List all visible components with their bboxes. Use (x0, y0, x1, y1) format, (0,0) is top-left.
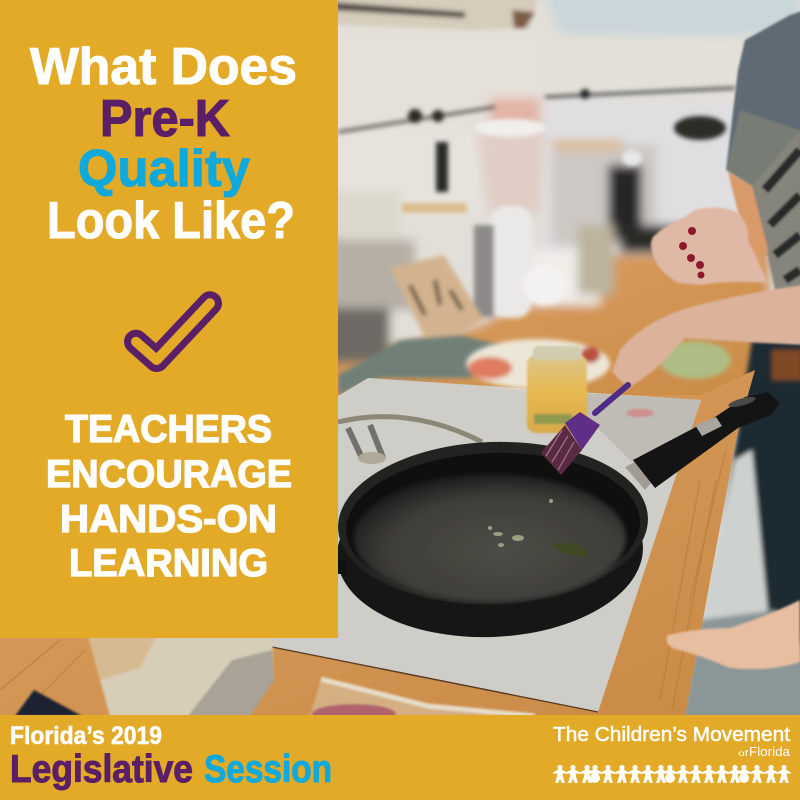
heading: What Does Pre-K Quality Look Like?: Look Like? (47, 192, 295, 250)
footer title: Florida's 2019 Legislative Session: Legislative (10, 748, 193, 791)
text block: Teachers encourage hands-on learning: ENCOURAGE (46, 453, 292, 496)
text block: Teachers encourage hands-on learning (46, 408, 292, 585)
footer title: Florida's 2019 Legislative Session: Session (204, 748, 332, 791)
text block: Teachers encourage hands-on learning: LEARNING (69, 542, 268, 585)
child's hand on counter (667, 600, 800, 669)
logo: The Children's Movement of Florida: of (738, 749, 749, 758)
oil droplets (488, 499, 588, 556)
frying pan (334, 392, 780, 642)
flour bowl in foreground (88, 636, 274, 716)
text block: Teachers encourage hands-on learning: HANDS-ON (60, 498, 277, 541)
heading: What Does Pre-K Quality Look Like?: Quality (78, 140, 250, 198)
person's t-shirt and arm (612, 10, 800, 388)
footer title: Florida's 2019 Legislative Session: Florida’s 2019 (10, 722, 162, 750)
logo: The Children's Movement of Florida: The Children’s Movement (553, 724, 790, 746)
text block: Teachers encourage hands-on learning: TEACHERS (65, 408, 272, 451)
kitchen background wall and appliances (300, 0, 800, 450)
upper hand with red nails (651, 208, 768, 285)
plate of food and green bowl (466, 339, 731, 389)
jar of oil (527, 346, 587, 433)
plastic-wrapped meat package (310, 679, 535, 724)
logo: The Children's Movement of Florida (553, 724, 791, 783)
heading: What Does Pre-K Quality Look Like?: Pre-K (100, 90, 230, 148)
heading: What Does Pre-K Quality Look Like?: What Does (30, 38, 297, 96)
footer title: Florida's 2019 Legislative Session (10, 722, 332, 791)
panel: yellow title panel (0, 0, 338, 638)
purple basting brush (541, 385, 628, 475)
icon: purple outlined checkmark (136, 303, 210, 360)
cutting board and countertop (0, 370, 755, 716)
frying pan handle (625, 392, 780, 490)
logo: The Children's Movement of Florida: Florida (749, 744, 791, 759)
heading: What Does Pre-K Quality Look Like? (30, 38, 297, 250)
back wall rails, blender, and utensils (330, 0, 735, 395)
icon: paper-chain of people (554, 765, 790, 783)
right-hand cabinet and person's jeans (680, 340, 800, 730)
dark cloth corner (15, 690, 82, 716)
panel: footer band (0, 715, 800, 800)
